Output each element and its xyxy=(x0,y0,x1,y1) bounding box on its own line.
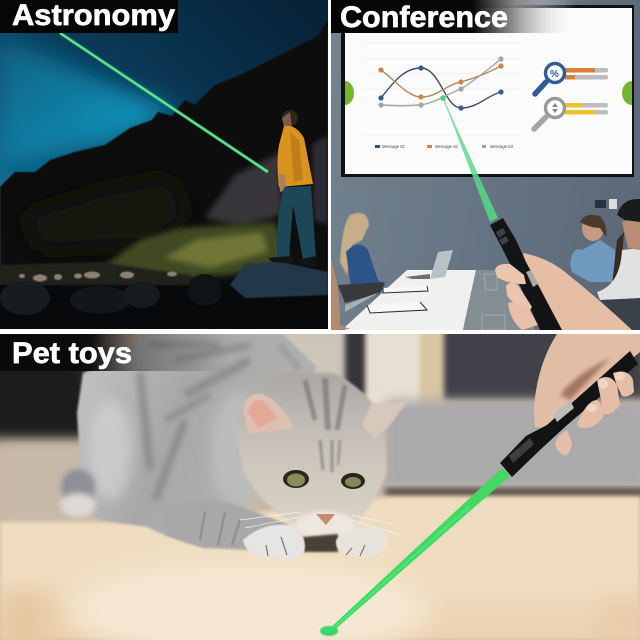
room wall switches xyxy=(595,199,617,209)
chart legend: Message 03 xyxy=(490,144,513,149)
right attendee xyxy=(597,199,640,330)
panel: conference xyxy=(331,0,640,330)
heading: Conference: Conference xyxy=(340,1,508,34)
fur stripes xyxy=(140,345,300,500)
laser beam xyxy=(448,110,498,222)
whiskers xyxy=(240,512,400,535)
laser beam xyxy=(60,33,268,172)
searchlight glow xyxy=(0,38,178,165)
chart legend: Message 02 xyxy=(435,144,458,149)
laser beam xyxy=(328,468,510,633)
icon: magnifier with percent bar: % xyxy=(550,69,559,80)
cat body xyxy=(62,334,317,548)
woman attendee xyxy=(331,213,385,330)
laptop xyxy=(405,250,453,279)
floor xyxy=(0,497,640,640)
person with orange jacket xyxy=(268,110,317,267)
icon: magnifier with percent bar xyxy=(535,64,608,94)
hand behind pointer xyxy=(534,334,640,428)
laser dot xyxy=(320,626,338,636)
chart legend xyxy=(375,145,513,149)
foreground rocks xyxy=(0,285,328,329)
blurred background xyxy=(0,371,92,448)
laser pointer xyxy=(500,351,638,477)
cat back leg xyxy=(61,469,95,505)
fingernails xyxy=(587,372,625,412)
icon: magnifier with arrows bar xyxy=(534,98,608,129)
fingers holding pointer xyxy=(555,372,634,455)
cat face xyxy=(283,470,309,488)
night hillside xyxy=(0,20,328,285)
cat foreleg xyxy=(163,500,290,550)
presentation screen xyxy=(341,5,634,177)
panel: astronomy xyxy=(0,0,328,329)
line chart xyxy=(362,43,520,135)
panel: pet toys xyxy=(0,325,640,640)
gap under chin xyxy=(303,534,338,552)
grass xyxy=(95,222,290,282)
table xyxy=(345,270,476,330)
cat paws xyxy=(243,525,305,559)
cat chest xyxy=(210,393,260,508)
heading: Pet toys: Pet toys xyxy=(12,337,132,370)
man attendee xyxy=(570,215,616,282)
chart legend: Message 01 xyxy=(382,144,405,149)
slide arrows xyxy=(345,81,632,105)
heading: Pet toys xyxy=(0,334,230,371)
fingers holding pointer xyxy=(495,264,538,330)
hand behind pointer xyxy=(523,253,632,330)
heading: Conference xyxy=(331,0,576,34)
cat head xyxy=(236,373,387,535)
cat ears xyxy=(243,394,294,433)
laser pointer xyxy=(490,218,562,330)
clipboards xyxy=(367,286,428,313)
cat xyxy=(60,334,407,559)
sandy rock face xyxy=(205,153,282,226)
